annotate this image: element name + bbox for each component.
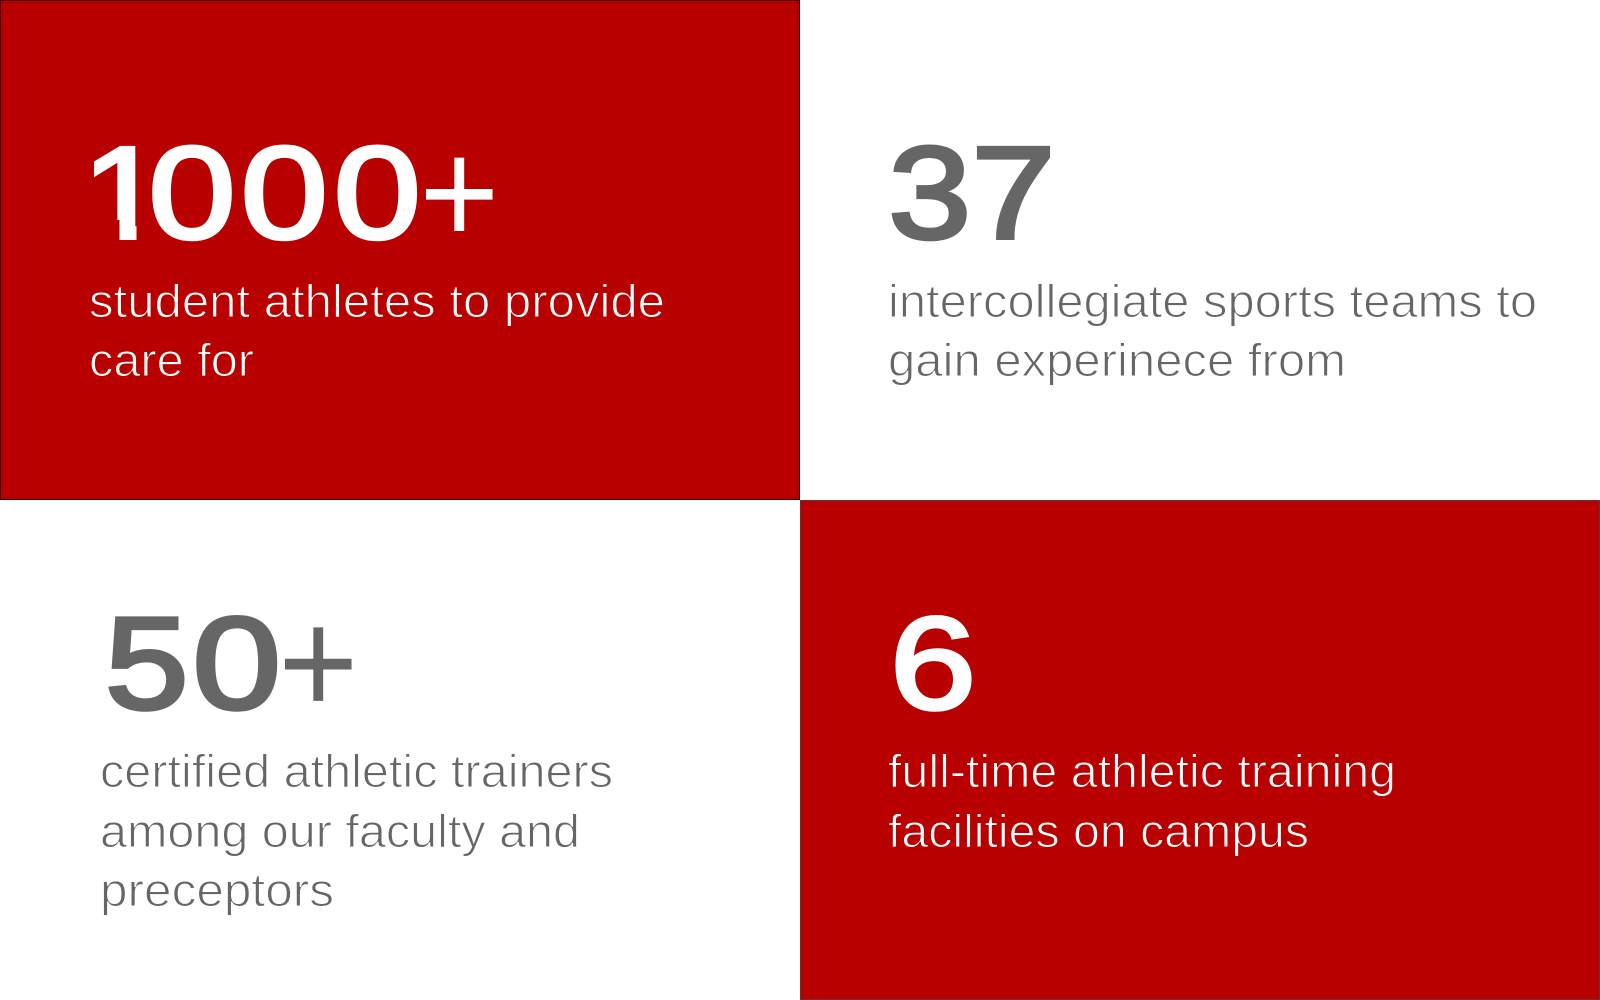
- stat: 50+: 0: [192, 590, 281, 736]
- stat: 1000+: 0: [334, 119, 421, 266]
- description: sports teams: gain experinece from: [888, 334, 1346, 386]
- panel: certified trainers: [0, 500, 800, 1000]
- stat: 1000+: 1: [82, 119, 166, 266]
- panel: student athletes: [0, 0, 800, 500]
- stat: 1000+: +: [419, 108, 499, 276]
- description: student athletes: [89, 275, 665, 386]
- description: certified trainers: certified athletic trainers: [100, 745, 613, 797]
- stat: 6: 6: [890, 590, 976, 736]
- description: training facilities: facilities on campus: [888, 805, 1309, 857]
- description: certified trainers: [100, 745, 613, 916]
- description: student athletes: student athletes to provide: [89, 275, 665, 327]
- description: training facilities: [888, 745, 1396, 857]
- description: sports teams: intercollegiate sports teams to: [888, 275, 1537, 327]
- description: certified trainers: preceptors: [100, 864, 334, 916]
- panel: sports teams: [800, 0, 1600, 500]
- stat: 37: 3: [888, 119, 971, 266]
- stat: 1000+: 0: [241, 119, 328, 266]
- description: training facilities: full-time athletic training: [888, 745, 1396, 797]
- stat: 1000+: [94, 144, 493, 242]
- stat: 50+: [105, 578, 358, 746]
- stat: 1000+: 0: [148, 119, 236, 266]
- stat: 50+: 5: [105, 590, 188, 736]
- stat: 37: 7: [972, 119, 1055, 266]
- panel: training facilities: [800, 500, 1600, 1000]
- stat: 37: [888, 119, 1055, 266]
- stat: 50+: +: [278, 578, 358, 746]
- description: certified trainers: among our faculty and: [100, 805, 580, 857]
- description: student athletes: care for: [89, 334, 254, 386]
- description: sports teams: [888, 275, 1537, 386]
